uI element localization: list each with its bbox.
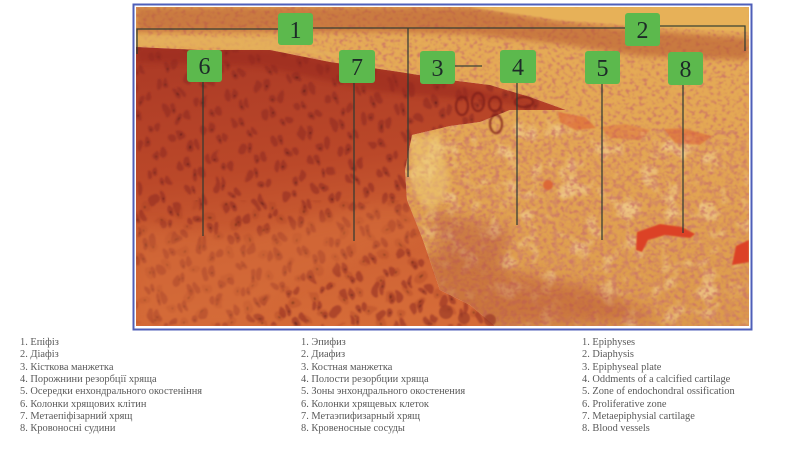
legend: English: 5. Zone of endochondral ossification [582, 386, 735, 397]
label 8 [668, 52, 703, 85]
legend: Russian: 1. Эпифиз [301, 337, 346, 348]
soft tissue zone [136, 7, 749, 330]
legend: English: 7. Metaepiphysial cartilage [582, 411, 695, 422]
legend: Russian: 4. Полости резорбции хряща [301, 374, 429, 385]
legend: Ukrainian [20, 337, 202, 434]
legend: Ukrainian: 3. Кісткова манжетка [20, 362, 113, 373]
label 1: 1 [290, 18, 302, 44]
legend: English: 6. Proliferative zone [582, 399, 667, 410]
legend: Russian: 8. Кровеносные сосуды [301, 423, 405, 434]
annotation lines [137, 26, 745, 241]
legend: English: 3. Epiphyseal plate [582, 362, 661, 373]
legend: Russian: 5. Зоны энхондрального окостенения [301, 386, 465, 397]
legend: Russian: 7. Метаэпифизарный хрящ [301, 411, 420, 422]
chondrocyte clusters near the edge [456, 93, 533, 133]
legend: Russian [301, 337, 465, 434]
label 4: 4 [512, 55, 524, 81]
label 1 [278, 13, 313, 45]
legend: English: 1. Epiphyses [582, 337, 635, 348]
label 4 [500, 50, 536, 83]
legend: Ukrainian: 2. Діафіз [20, 349, 59, 360]
frame: blue border [134, 4, 752, 330]
legend: Ukrainian: 4. Порожнини резорбції хряща [20, 374, 157, 385]
label 3: 3 [432, 56, 444, 82]
label 2 [625, 13, 660, 46]
cartilage zone [136, 30, 576, 326]
label 6 [187, 50, 222, 82]
legend: Russian: 2. Диафиз [301, 349, 345, 360]
legend: Ukrainian: 7. Метаепіфізарний хрящ [20, 411, 132, 422]
legend: Russian: 6. Колонки хрящевых клеток [301, 399, 429, 410]
legend: English: 8. Blood vessels [582, 423, 650, 434]
label 2: 2 [636, 18, 648, 44]
legend: English: 2. Diaphysis [582, 349, 634, 360]
label 6: 6 [198, 54, 210, 80]
label 7 [339, 50, 375, 83]
legend: Ukrainian: 1. Епіфіз [20, 337, 59, 348]
micrograph: tissue section [136, 7, 749, 330]
dark cells at bottom edge [439, 305, 496, 326]
legend: Ukrainian: 8. Кровоносні судини [20, 423, 115, 434]
label 5: 5 [596, 56, 608, 82]
blood vessel patches [543, 112, 749, 265]
figure: micrograph with numbered labels [132, 4, 752, 330]
label 5 [585, 51, 620, 84]
legend: English [582, 337, 735, 434]
label 3 [420, 51, 455, 84]
legend: English: 4. Oddments of a calcified cartilage [582, 374, 730, 385]
legend: Russian: 3. Костная манжетка [301, 362, 392, 373]
label 7: 7 [351, 55, 363, 81]
label 8: 8 [680, 57, 692, 83]
legend: Ukrainian: 5. Осередки енхондрального окостеніння [20, 386, 202, 397]
legend: Ukrainian: 6. Колонки хрящових клітин [20, 399, 146, 410]
